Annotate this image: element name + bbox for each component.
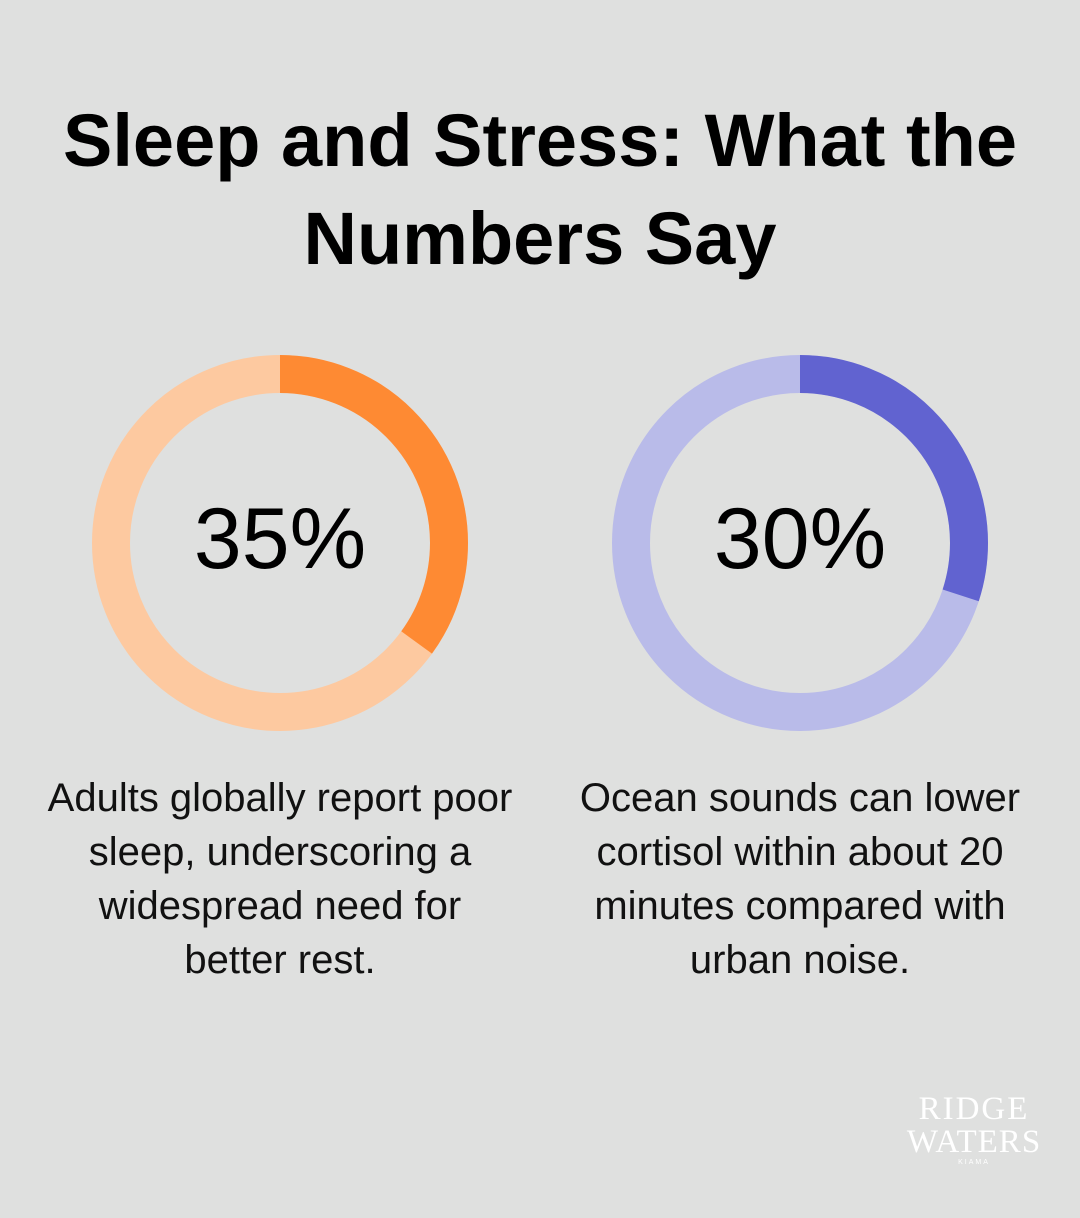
text: adults poor sleep: [48, 776, 512, 982]
title: Numbers Say: [304, 197, 776, 280]
text: ocean sounds: cortisol within about 20: [597, 830, 1003, 874]
text: adults poor sleep: Adults globally report poor: [48, 776, 512, 820]
text: adults poor sleep: widespread need for: [99, 884, 461, 928]
text: ocean sounds: [580, 776, 1020, 982]
text: ocean sounds: urban noise.: [690, 938, 910, 982]
logo: WATERS: [907, 1124, 1041, 1160]
donut chart: 30%: [612, 355, 988, 731]
text: ocean sounds: Ocean sounds can lower: [580, 776, 1020, 820]
text: adults poor sleep: sleep, underscoring a: [89, 830, 471, 874]
stat: 30%: 30%: [714, 491, 886, 587]
stat: 35%: 35%: [194, 491, 366, 587]
logo: KIAMA: [958, 1159, 990, 1166]
title: Sleep and Stress: What the: [63, 99, 1017, 182]
text: adults poor sleep: better rest.: [184, 938, 376, 982]
text: ocean sounds: minutes compared with: [594, 884, 1006, 928]
title: [63, 99, 1017, 280]
donut chart: 35%: [92, 355, 468, 731]
logo: RIDGE: [919, 1091, 1029, 1127]
logo: [907, 1091, 1041, 1166]
